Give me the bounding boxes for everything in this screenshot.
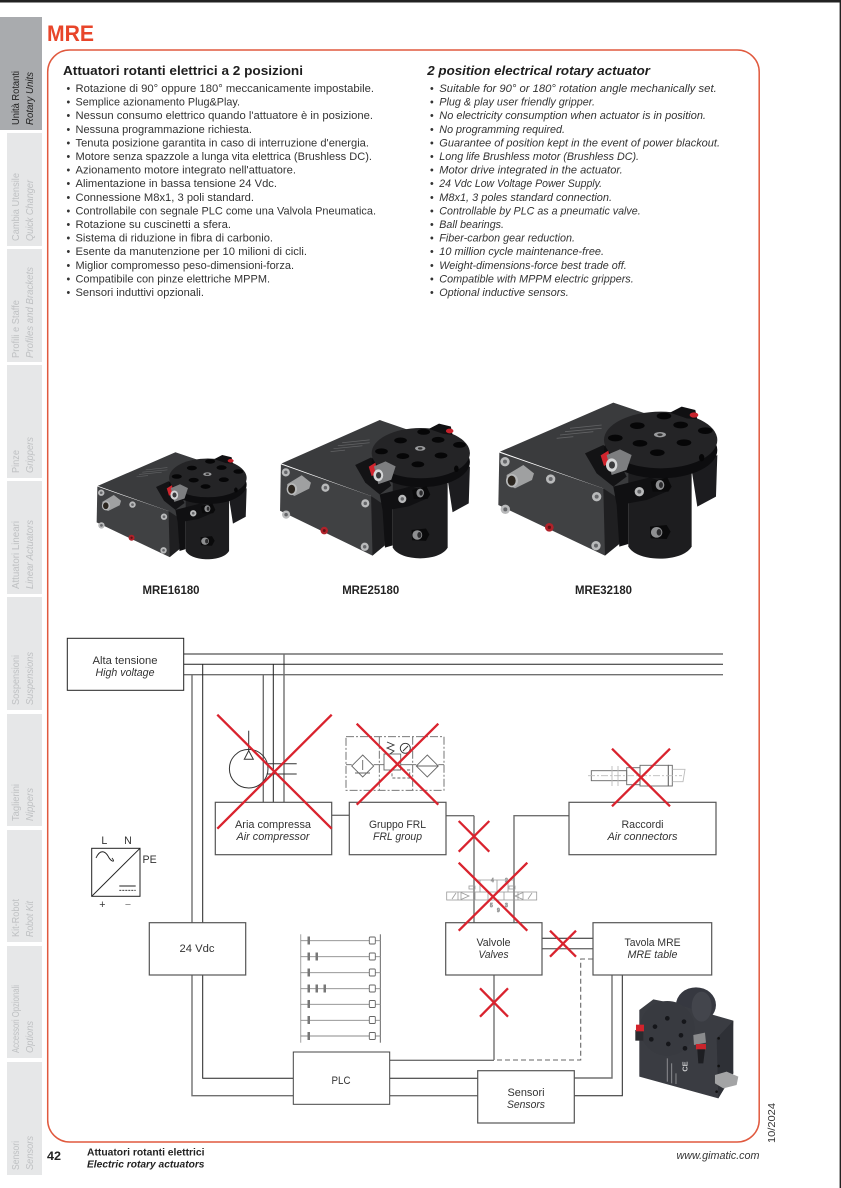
tab: sensors: Sensors bbox=[25, 1136, 36, 1170]
actuator illustration medium bbox=[280, 420, 470, 558]
English bullet list: Motor drive integrated in the actuator. bbox=[439, 165, 623, 177]
English bullet list: • bbox=[430, 97, 434, 109]
box: air compressor: Air compressor bbox=[235, 831, 310, 843]
Italian bullet list: Nessuna programmazione richiesta. bbox=[76, 124, 252, 136]
English bullet list: Compatible with MPPM electric grippers. bbox=[439, 273, 634, 285]
English bullet list: • bbox=[430, 137, 434, 149]
Italian bullet list: Connessione M8x1, 3 poli standard. bbox=[76, 192, 254, 204]
box: air connectors bbox=[569, 802, 716, 855]
English bullet list: • bbox=[430, 83, 434, 95]
product: MRE32180 bbox=[498, 403, 717, 597]
page number: 42 bbox=[47, 1149, 61, 1163]
tab: profiles and brackets bbox=[7, 249, 42, 362]
box: sensors: Sensors bbox=[507, 1099, 546, 1111]
tab: quick changer bbox=[7, 133, 42, 246]
website: www.gimatic.com bbox=[676, 1150, 760, 1162]
Italian bullet list: • bbox=[66, 97, 70, 109]
tab: quick changer: Quick Changer bbox=[25, 179, 36, 241]
icon: PLC ladder diagram bbox=[301, 934, 380, 1043]
English bullet list: No programming required. bbox=[439, 124, 565, 136]
Italian bullet list: Sensori induttivi opzionali. bbox=[76, 287, 204, 299]
tab: quick changer: Cambia Utensile bbox=[11, 173, 22, 241]
icon: MRE table actuator render: CE bbox=[680, 1061, 689, 1072]
box: PLC bbox=[293, 1052, 390, 1104]
English bullet list: • bbox=[430, 165, 434, 177]
tab: nippers: Taglierini bbox=[11, 784, 22, 821]
icon: valve symbol: 9 bbox=[497, 908, 500, 914]
English bullet list: Controllable by PLC as a pneumatic valve. bbox=[439, 205, 641, 217]
tab: grippers: Grippers bbox=[25, 437, 36, 473]
Italian bullet list: Nessun consumo elettrico quando l'attuatore è in posizione. bbox=[76, 110, 373, 122]
English bullet list: • bbox=[430, 192, 434, 204]
box: 24 Vdc bbox=[149, 923, 246, 975]
tab: sensors: Sensori bbox=[11, 1141, 22, 1170]
icon: FRL symbol bbox=[346, 737, 444, 790]
footer title bbox=[87, 1146, 205, 1170]
Italian bullet list: • bbox=[66, 246, 70, 258]
tab: linear actuators bbox=[7, 481, 42, 594]
tab: options: Accessori Opzionali bbox=[11, 985, 22, 1053]
product: MRE25180 bbox=[280, 420, 470, 597]
box: PLC: PLC bbox=[332, 1075, 351, 1087]
wiring diagram bbox=[67, 638, 738, 1123]
tab: rotary units (active): Unità Rotanti bbox=[11, 71, 22, 125]
main panel border bbox=[48, 50, 759, 1142]
Italian bullet list: Rotazione di 90° oppure 180° meccanicamente impostabile. bbox=[76, 83, 374, 95]
Italian bullet list: Controllabile con segnale PLC come una Valvola Pneumatica. bbox=[76, 205, 376, 217]
Italian bullet list: • bbox=[66, 151, 70, 163]
Italian bullet list: Azionamento motore integrato nell'attuatore. bbox=[76, 165, 296, 177]
box: air compressor bbox=[215, 802, 332, 855]
Italian bullet list: • bbox=[66, 260, 70, 272]
English bullet list: 24 Vdc Low Voltage Power Supply. bbox=[438, 178, 602, 190]
English bullet list: • bbox=[430, 233, 434, 245]
tab: suspensions: Suspensions bbox=[25, 652, 36, 705]
English bullet list: Fiber-carbon gear reduction. bbox=[439, 233, 575, 245]
footer title: Attuatori rotanti elettrici bbox=[87, 1146, 205, 1158]
icon: valve symbol: 3 bbox=[505, 903, 508, 909]
tab: rotary units (active): Rotary Units bbox=[25, 72, 36, 125]
label MRE16180: MRE16180 bbox=[142, 585, 200, 597]
tab: nippers: Nippers bbox=[25, 788, 36, 821]
Italian bullet list: Motore senza spazzole a lunga vita elettrica (Brushless DC). bbox=[76, 151, 372, 163]
Italian bullet list: Compatibile con pinze elettriche MPPM. bbox=[76, 273, 270, 285]
tab: nippers bbox=[7, 714, 42, 826]
icon: valve symbol: 5 bbox=[490, 903, 493, 909]
tab: sensors bbox=[7, 1062, 42, 1175]
Italian bullet list: Esente da manutenzione per 10 milioni di cicli. bbox=[76, 246, 307, 258]
Italian bullet list: Miglior compromesso peso-dimensioni-forza. bbox=[76, 260, 294, 272]
English bullet list: • bbox=[430, 246, 434, 258]
text block: Italian features bbox=[63, 64, 376, 299]
text block: English features bbox=[426, 64, 720, 299]
English bullet list: 10 million cycle maintenance-free. bbox=[439, 246, 604, 258]
actuator illustration small bbox=[97, 452, 247, 559]
icon: power supply symbol: − bbox=[125, 899, 131, 911]
Italian bullet list: • bbox=[66, 83, 70, 95]
Italian bullet list: • bbox=[66, 124, 70, 136]
icon: valve symbol: 4 bbox=[491, 878, 494, 884]
icon: MRE table actuator render bbox=[635, 987, 738, 1098]
English bullet list: • bbox=[430, 219, 434, 231]
box: MRE table bbox=[593, 923, 712, 975]
English bullet list: Plug & play user friendly gripper. bbox=[439, 97, 595, 109]
label MRE25180: MRE25180 bbox=[342, 585, 399, 597]
English bullet list: • bbox=[430, 287, 434, 299]
icon: valve symbol: 2 bbox=[505, 878, 508, 884]
label MRE32180: MRE32180 bbox=[575, 585, 632, 597]
box: FRL group: FRL group bbox=[373, 831, 422, 843]
footer title: Electric rotary actuators bbox=[87, 1158, 205, 1170]
footer bbox=[47, 1103, 778, 1170]
English bullet list: Guarantee of position kept in the event of power blackout. bbox=[439, 137, 720, 149]
box: high voltage: Alta tensione bbox=[92, 655, 158, 667]
sidebar tabs bbox=[0, 17, 42, 1175]
heading: English: 2 position electrical rotary actuator bbox=[426, 64, 651, 78]
gray conductors bbox=[184, 654, 723, 1096]
box: MRE table: MRE table bbox=[628, 949, 678, 961]
title: MRE bbox=[47, 21, 94, 46]
red crosses bbox=[217, 715, 670, 1017]
date: 10/2024 bbox=[766, 1103, 778, 1143]
icon: power supply symbol: + bbox=[99, 899, 105, 911]
tab: options bbox=[7, 946, 42, 1058]
English bullet list: • bbox=[430, 205, 434, 217]
English bullet list: • bbox=[430, 124, 434, 136]
English bullet list: • bbox=[430, 273, 434, 285]
English bullet list: Long life Brushless motor (Brushless DC). bbox=[439, 151, 639, 163]
box: valves: Valves bbox=[478, 949, 509, 961]
English bullet list: Suitable for 90° or 180° rotation angle mechanically set. bbox=[439, 83, 717, 95]
Italian bullet list: • bbox=[66, 219, 70, 231]
English bullet list: Ball bearings. bbox=[439, 219, 504, 231]
dashed signal line bbox=[494, 959, 593, 1060]
product: MRE16180 bbox=[97, 452, 247, 597]
English bullet list: Weight-dimensions-force best trade off. bbox=[439, 260, 627, 272]
box: FRL group bbox=[349, 802, 446, 855]
English bullet list: • bbox=[430, 110, 434, 122]
box: air connectors: Air connectors bbox=[606, 831, 678, 843]
Italian bullet list: • bbox=[66, 287, 70, 299]
box: valves bbox=[446, 923, 542, 975]
English bullet list: No electricity consumption when actuator is in position. bbox=[439, 110, 706, 122]
English bullet list: • bbox=[430, 151, 434, 163]
Italian bullet list: Rotazione su cuscinetti a sfera. bbox=[76, 219, 231, 231]
icon: power supply symbol: L bbox=[101, 835, 107, 847]
icon: valve symbol bbox=[447, 878, 537, 914]
Italian bullet list: Alimentazione in bassa tensione 24 Vdc. bbox=[76, 178, 277, 190]
tab: grippers bbox=[7, 365, 42, 478]
box: FRL group: Gruppo FRL bbox=[369, 819, 426, 831]
box: MRE table: Tavola MRE bbox=[624, 937, 680, 949]
Italian bullet list: • bbox=[66, 233, 70, 245]
actuator illustration large bbox=[498, 403, 717, 559]
dark conductors bbox=[184, 664, 723, 1096]
tab: profiles and brackets: Profili e Staffe bbox=[11, 300, 22, 358]
Italian bullet list: • bbox=[66, 192, 70, 204]
tab: robot kit bbox=[7, 830, 42, 942]
Italian bullet list: • bbox=[66, 110, 70, 122]
icon: compressor symbol bbox=[229, 731, 297, 788]
English bullet list: M8x1, 3 poles standard connection. bbox=[439, 192, 612, 204]
tab: options: Options bbox=[25, 1021, 36, 1053]
Italian bullet list: Tenuta posizione garantita in caso di interruzione d'energia. bbox=[76, 137, 369, 149]
tab: profiles and brackets: Profiles and Brackets bbox=[25, 267, 36, 358]
English bullet list: • bbox=[430, 178, 434, 190]
box: air compressor: Aria compressa bbox=[235, 819, 311, 831]
English bullet list: • bbox=[430, 260, 434, 272]
tab: robot kit: Robot Kit bbox=[25, 900, 36, 937]
Italian bullet list: • bbox=[66, 205, 70, 217]
English bullet list: Optional inductive sensors. bbox=[439, 287, 569, 299]
icon: connector symbol bbox=[588, 765, 685, 786]
Italian bullet list: • bbox=[66, 273, 70, 285]
box: 24 Vdc: 24 Vdc bbox=[180, 943, 215, 955]
Italian bullet list: • bbox=[66, 178, 70, 190]
icon: power supply symbol: N bbox=[124, 835, 132, 847]
box: high voltage bbox=[67, 638, 184, 690]
tab: grippers: Pinze bbox=[11, 450, 22, 473]
tab: robot kit: Kit-Robot bbox=[11, 899, 22, 937]
icon: power supply symbol: PE bbox=[142, 854, 157, 866]
box: air connectors: Raccordi bbox=[622, 819, 664, 831]
Italian bullet list: Semplice azionamento Plug&Play. bbox=[76, 97, 240, 109]
Italian bullet list: • bbox=[66, 137, 70, 149]
tab: suspensions: Sospensioni bbox=[11, 655, 22, 705]
tab: suspensions bbox=[7, 597, 42, 710]
box: sensors bbox=[478, 1071, 574, 1123]
box: valves: Valvole bbox=[476, 937, 511, 949]
box: high voltage: High voltage bbox=[96, 667, 155, 679]
Italian bullet list: Sistema di riduzione in fibra di carbonio. bbox=[76, 233, 273, 245]
tab: linear actuators: Attuatori Lineari bbox=[11, 521, 22, 589]
English bullet list bbox=[430, 83, 720, 299]
Italian bullet list: • bbox=[66, 165, 70, 177]
heading: Italian: Attuatori rotanti elettrici a 2 posizioni bbox=[63, 64, 303, 78]
Italian bullet list bbox=[66, 83, 376, 299]
tab: rotary units (active) bbox=[0, 17, 42, 130]
tab: linear actuators: Linear Actuators bbox=[25, 520, 36, 589]
box: sensors: Sensori bbox=[508, 1087, 544, 1099]
icon: power supply symbol bbox=[92, 835, 157, 911]
